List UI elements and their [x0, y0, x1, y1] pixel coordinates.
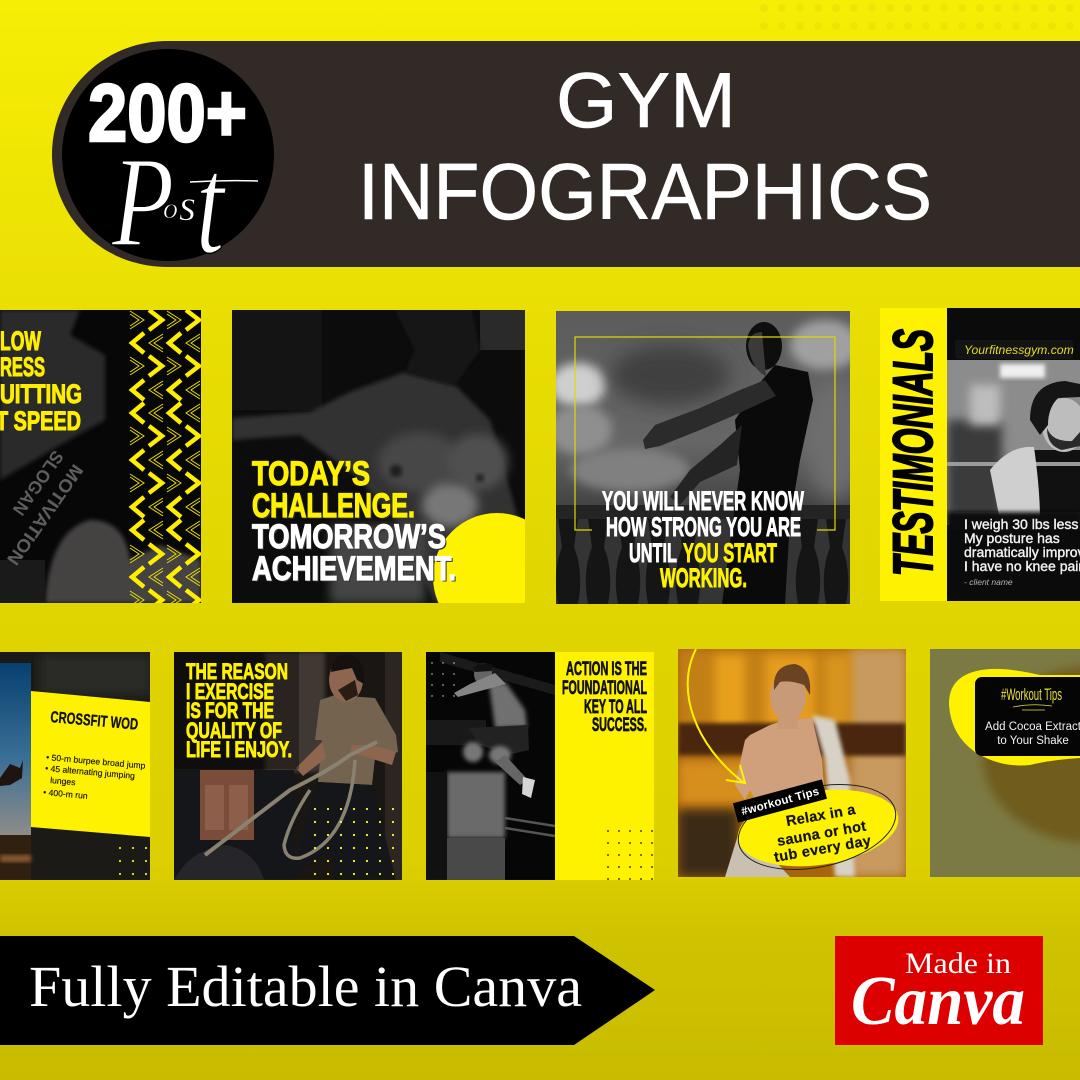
- panel: testimonials: [880, 308, 1080, 601]
- yellow blob: [949, 669, 1080, 765]
- card text: [985, 721, 1080, 747]
- workout list: • 45 alternating jumping: [45, 763, 136, 781]
- text backdrop: [174, 652, 299, 769]
- hashtag tag: #workout Tips: [740, 786, 820, 818]
- headline: I EXERCISE: [186, 679, 274, 704]
- quote text: YOU WILL NEVER KNOW: [602, 486, 804, 516]
- photo: shirtless man: [232, 300, 525, 603]
- badge: 200+ Post: [62, 49, 274, 283]
- headline: UITTING: [0, 379, 82, 409]
- dots: [118, 846, 148, 876]
- headline: RESS: [0, 352, 45, 382]
- client name: - client name: [964, 577, 1013, 587]
- title line 1: GYM: [556, 56, 736, 144]
- panel: crossfit wod: [0, 652, 150, 880]
- headline: FOUNDATIONAL: [562, 678, 647, 699]
- headline: ACHIEVEMENT.: [254, 552, 458, 590]
- photo: cocoa powder: [982, 667, 1080, 843]
- headline: LOW: [0, 326, 41, 356]
- Post script text: s: [179, 181, 196, 230]
- canva script: Canva: [851, 963, 1025, 1040]
- chevron pattern: [130, 310, 200, 610]
- headline: TOMORROW’S: [254, 520, 448, 558]
- photo: athlete at dusk: [0, 655, 150, 880]
- yellow text column: [555, 652, 654, 880]
- workout list: • 50-m burpee broad jump: [46, 752, 146, 771]
- headline: [252, 460, 456, 582]
- quote text: HOW STRONG YOU ARE: [606, 512, 801, 542]
- panel: action is the foundational key: [426, 652, 654, 880]
- tip text: sauna or hot: [776, 819, 867, 850]
- badge: made in canva: [835, 936, 1043, 1045]
- card heading: CROSSFIT WOD: [50, 709, 139, 734]
- headline: IS FOR THE: [186, 698, 274, 723]
- workout list: [44, 754, 146, 799]
- headline: [0, 326, 82, 436]
- panel: workout tips sauna: [678, 649, 906, 883]
- panel: motivation chevrons: [0, 310, 201, 610]
- tip text: [774, 806, 870, 862]
- Post script text: t: [196, 128, 226, 283]
- testimonial text: [964, 516, 1080, 574]
- photo: man with barbell: [947, 360, 1080, 528]
- quote text: WORKING.: [660, 563, 747, 593]
- dot pattern: [314, 808, 394, 876]
- banner bar: [52, 41, 1080, 267]
- vertical title: TESTIMONIALS: [881, 329, 944, 576]
- headline: KEY TO ALL: [584, 697, 647, 718]
- 200+ text: 200+: [88, 68, 247, 159]
- banner text: Fully Editable in Canva: [29, 954, 582, 1019]
- balustrade: [556, 505, 850, 604]
- yellow curved arrow: [688, 649, 745, 783]
- Post script text: P: [111, 131, 174, 273]
- photo: man lying: MOTIVATION: [3, 461, 87, 569]
- headline: [562, 659, 647, 736]
- headline: CHALLENGE.: [252, 487, 415, 525]
- yellow slanted card: [31, 691, 150, 837]
- workout list: • 400-m run: [43, 787, 88, 801]
- headline: THE REASON: [186, 659, 288, 684]
- website label: Yourfitnessgym.com: [964, 343, 1074, 357]
- card underline: [1013, 705, 1052, 710]
- made in: Made in: [905, 947, 1011, 980]
- dots: [607, 820, 654, 880]
- testimonial text: I weigh 30 lbs less: [964, 516, 1078, 532]
- yellow frame: [575, 337, 835, 530]
- headline: LIFE I ENJOY.: [186, 737, 292, 762]
- script t-bar stroke: [190, 181, 258, 182]
- testimonial text: My posture has: [964, 530, 1060, 546]
- Post script text: o: [163, 192, 178, 225]
- headline: CHALLENGE.: [254, 488, 416, 526]
- panel: never know how strong: [548, 311, 865, 604]
- workout list: lunges: [50, 775, 76, 787]
- tip card: [975, 677, 1080, 756]
- quote text: UNTIL: [629, 538, 677, 568]
- panel: cocoa tip: [930, 649, 1080, 877]
- card text: Add Cocoa Extract: [985, 721, 1080, 733]
- yellow side strip: [880, 308, 947, 601]
- headline: TOMORROW’S: [252, 518, 446, 556]
- headline: TODAY’S: [252, 455, 370, 493]
- arrow banner: fully editable: [0, 936, 655, 1045]
- photo: man lying: [0, 310, 201, 603]
- website label: [955, 340, 1074, 359]
- title line 2: INFOGRAPHICS: [358, 147, 932, 236]
- hashtag tag: [733, 779, 827, 823]
- photo: man lying: SLOGAN: [9, 447, 67, 519]
- tip text: tub every day: [773, 833, 872, 866]
- quote text: YOU START: [683, 538, 777, 568]
- photo: box jump athlete: [426, 652, 555, 880]
- decorative dots top right: [760, 0, 1080, 36]
- headline: ACHIEVEMENT.: [252, 550, 456, 588]
- headline: SUCCESS.: [592, 715, 647, 736]
- quote text: [602, 486, 804, 593]
- panel: today's challenge: [232, 310, 525, 603]
- headline: [186, 659, 292, 762]
- yellow speech ellipse: [738, 790, 898, 866]
- panel: the reason I exercise: [174, 652, 402, 880]
- headline: ACTION IS THE: [566, 659, 647, 680]
- header banner: [52, 41, 1080, 283]
- ellipse outline: [738, 784, 896, 870]
- photo: man in sauna: [678, 649, 906, 877]
- photo: clouds: [548, 320, 865, 500]
- card text: to Your Shake: [997, 735, 1069, 747]
- tip text: Relax in a: [785, 802, 858, 830]
- headline: QUALITY OF: [186, 718, 282, 743]
- yellow circle: [433, 513, 525, 603]
- man silhouette: [643, 322, 813, 604]
- Post script text: [111, 128, 226, 283]
- photo: man with battle rope: [174, 652, 402, 880]
